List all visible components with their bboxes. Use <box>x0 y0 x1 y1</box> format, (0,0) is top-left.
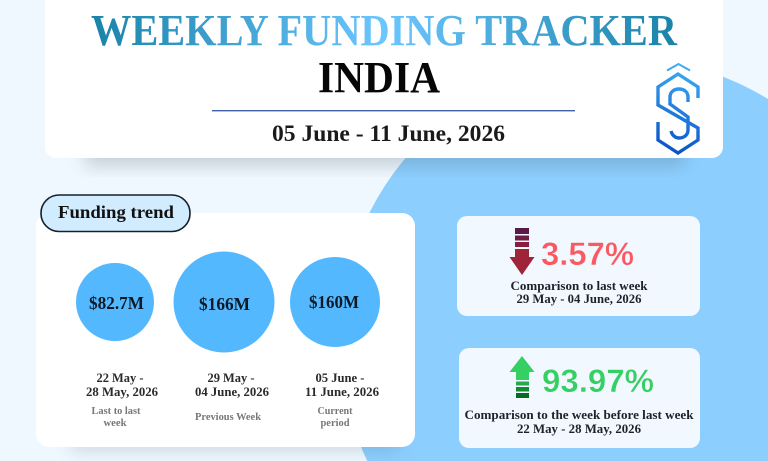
label: current period: period <box>320 418 350 429</box>
bubble: 166M: $166M <box>199 294 250 314</box>
bubble: 82.7M <box>76 263 154 341</box>
icon: down arrow <box>510 228 534 275</box>
background circle <box>340 58 768 461</box>
label: previous week: Previous Week <box>195 412 261 423</box>
label: current period <box>305 371 379 429</box>
panel: comparison to week before last <box>459 348 700 448</box>
label: last to last week: Last to last <box>92 406 141 417</box>
caption: 29 May - 04 June, 2026 <box>516 292 642 306</box>
caption: Comparison to the week before last week <box>464 408 694 422</box>
caption: Comparison to last week <box>510 279 648 293</box>
label: last to last week <box>86 371 158 429</box>
stat: 3.57%: 3.57% <box>541 236 634 272</box>
bubble: 160M <box>290 257 380 347</box>
stat: 93.97%: 93.97% <box>542 363 654 399</box>
icon: up arrow <box>510 356 534 398</box>
bubble: 82.7M: $82.7M <box>89 293 144 313</box>
label: current period: 05 June - <box>316 371 364 385</box>
date range: 05 June - 11 June, 2026 <box>272 121 505 147</box>
label: previous week: 04 June, 2026 <box>195 385 269 399</box>
label: last to last week: 22 May - <box>96 371 144 385</box>
caption <box>510 279 648 306</box>
label: current period: 11 June, 2026 <box>305 385 379 399</box>
bubble: 166M <box>174 252 274 352</box>
icon: logo <box>658 64 698 153</box>
panel: header <box>45 0 723 166</box>
label: previous week <box>195 371 269 423</box>
heading: funding trend pill <box>41 195 190 232</box>
subtitle: India: INDIA <box>318 53 440 102</box>
panel: comparison to last week <box>457 216 700 316</box>
bubble: 160M: $160M <box>309 292 359 312</box>
label: last to last week: week <box>104 418 127 429</box>
heading: funding trend pill: Funding trend <box>58 202 174 222</box>
caption: 22 May - 28 May, 2026 <box>517 422 641 436</box>
label: last to last week: 28 May, 2026 <box>86 385 158 399</box>
label: current period: Current <box>318 406 353 417</box>
label: previous week: 29 May - <box>208 371 254 385</box>
title: WEEKLY FUNDING TRACKER <box>91 6 678 55</box>
caption <box>464 408 694 436</box>
panel: funding trend <box>36 213 415 450</box>
